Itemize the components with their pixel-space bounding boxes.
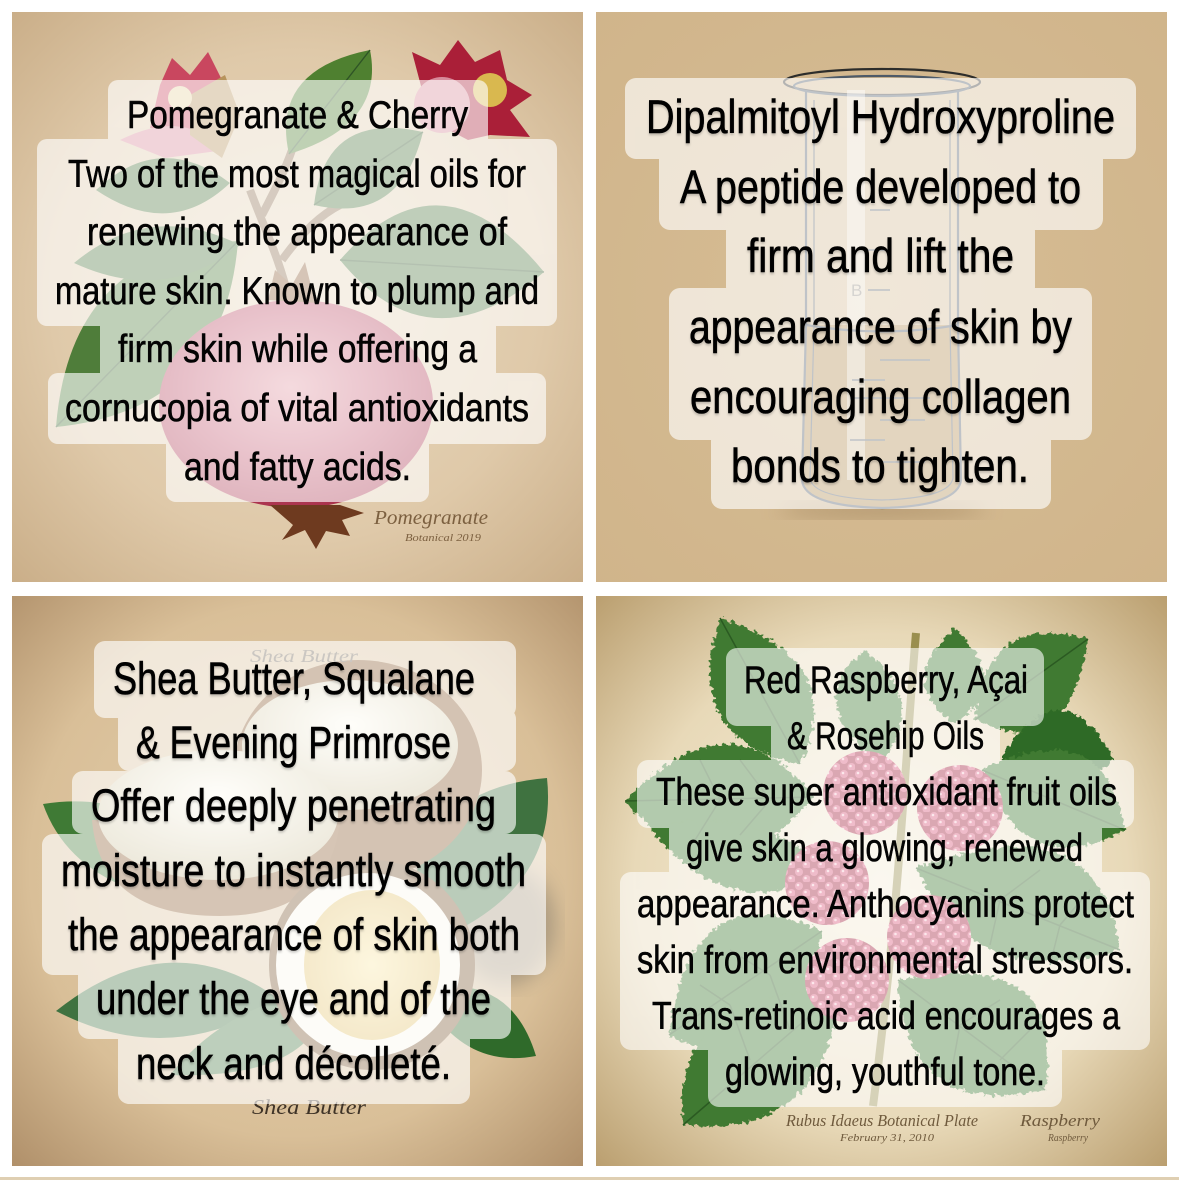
heading: & Evening Primrose [136, 717, 451, 768]
panel background [12, 596, 583, 1166]
botanical caption: Raspberry [1047, 1132, 1088, 1144]
right blossom [412, 40, 532, 140]
panel: dipalmitoyl hydroxyproline [596, 12, 1167, 582]
fruit crown [270, 505, 364, 549]
illustration: raspberry branch [625, 618, 1125, 1126]
heading [744, 659, 1028, 758]
top faint label: Shea Butter [250, 646, 359, 666]
cut shea nut [269, 860, 475, 1070]
translucent text highlight [620, 648, 1150, 1107]
illustration: glass beaker [777, 69, 987, 518]
botanical signature [373, 507, 488, 544]
beaker scale label: B [851, 281, 862, 300]
illustration: shea nuts and leaves [43, 660, 555, 1075]
panel background [12, 12, 583, 582]
panel background [596, 596, 1167, 1166]
heading: Red Raspberry, Açai [744, 659, 1028, 702]
panel: shea butter, squalane and evening primrose [12, 596, 583, 1166]
leaves [625, 618, 1125, 1126]
body text: encouraging collagen [690, 370, 1071, 423]
heading [113, 653, 475, 768]
body text: moisture to instantly smooth [61, 845, 526, 896]
body text: and fatty acids. [184, 446, 411, 489]
body text [680, 160, 1081, 492]
panel: pomegranate and cherry [12, 12, 583, 582]
body text [55, 153, 539, 489]
body text: A peptide developed to [680, 160, 1081, 213]
panel background [596, 12, 1167, 582]
botanical caption [785, 1111, 1101, 1144]
botanical caption: Rubus Idaeus Botanical Plate [785, 1111, 978, 1130]
body text: give skin a glowing, renewed [686, 827, 1083, 870]
body text: cornucopia of vital antioxidants [65, 387, 529, 430]
heading: Shea Butter, Squalane [113, 653, 475, 704]
translucent text highlight [37, 80, 557, 502]
back shea nut [234, 660, 482, 880]
left shea nut [92, 820, 340, 916]
left blossom [120, 52, 240, 158]
stem [873, 633, 916, 1106]
heading: & Rosehip Oils [787, 715, 984, 758]
bottom script label: Shea Butter [252, 1095, 367, 1119]
body text: firm and lift the [747, 229, 1014, 282]
botanical signature: Pomegranate [373, 507, 488, 529]
botanical signature: Botanical 2019 [405, 532, 482, 544]
panel: red raspberry, acai and rosehip oils [596, 596, 1167, 1166]
translucent text highlight [625, 78, 1136, 509]
illustration: pomegranate branch [56, 40, 544, 549]
body text: under the eye and of the [96, 973, 491, 1024]
body text: mature skin. Known to plump and [55, 270, 539, 313]
botanical caption: February 31, 2010 [839, 1132, 935, 1144]
leaf veins [625, 618, 1125, 1125]
heading: Pomegranate & Cherry [127, 94, 468, 137]
body text: appearance of skin by [689, 300, 1072, 353]
body text [637, 771, 1134, 1094]
body text: firm skin while offering a [118, 328, 477, 371]
body text: neck and décolleté. [136, 1038, 451, 1089]
body text: Two of the most magical oils for [68, 153, 526, 196]
translucent text highlight [42, 641, 546, 1104]
body text: bonds to tighten. [731, 439, 1029, 492]
botanical caption: Raspberry [1019, 1111, 1101, 1130]
body text [61, 780, 526, 1089]
body text: glowing, youthful tone. [725, 1051, 1045, 1094]
body text: the appearance of skin both [68, 909, 520, 960]
pomegranate fruit [159, 300, 433, 508]
body text: renewing the appearance of [87, 211, 507, 254]
body text: Offer deeply penetrating [91, 780, 496, 831]
berries [785, 751, 1003, 1022]
